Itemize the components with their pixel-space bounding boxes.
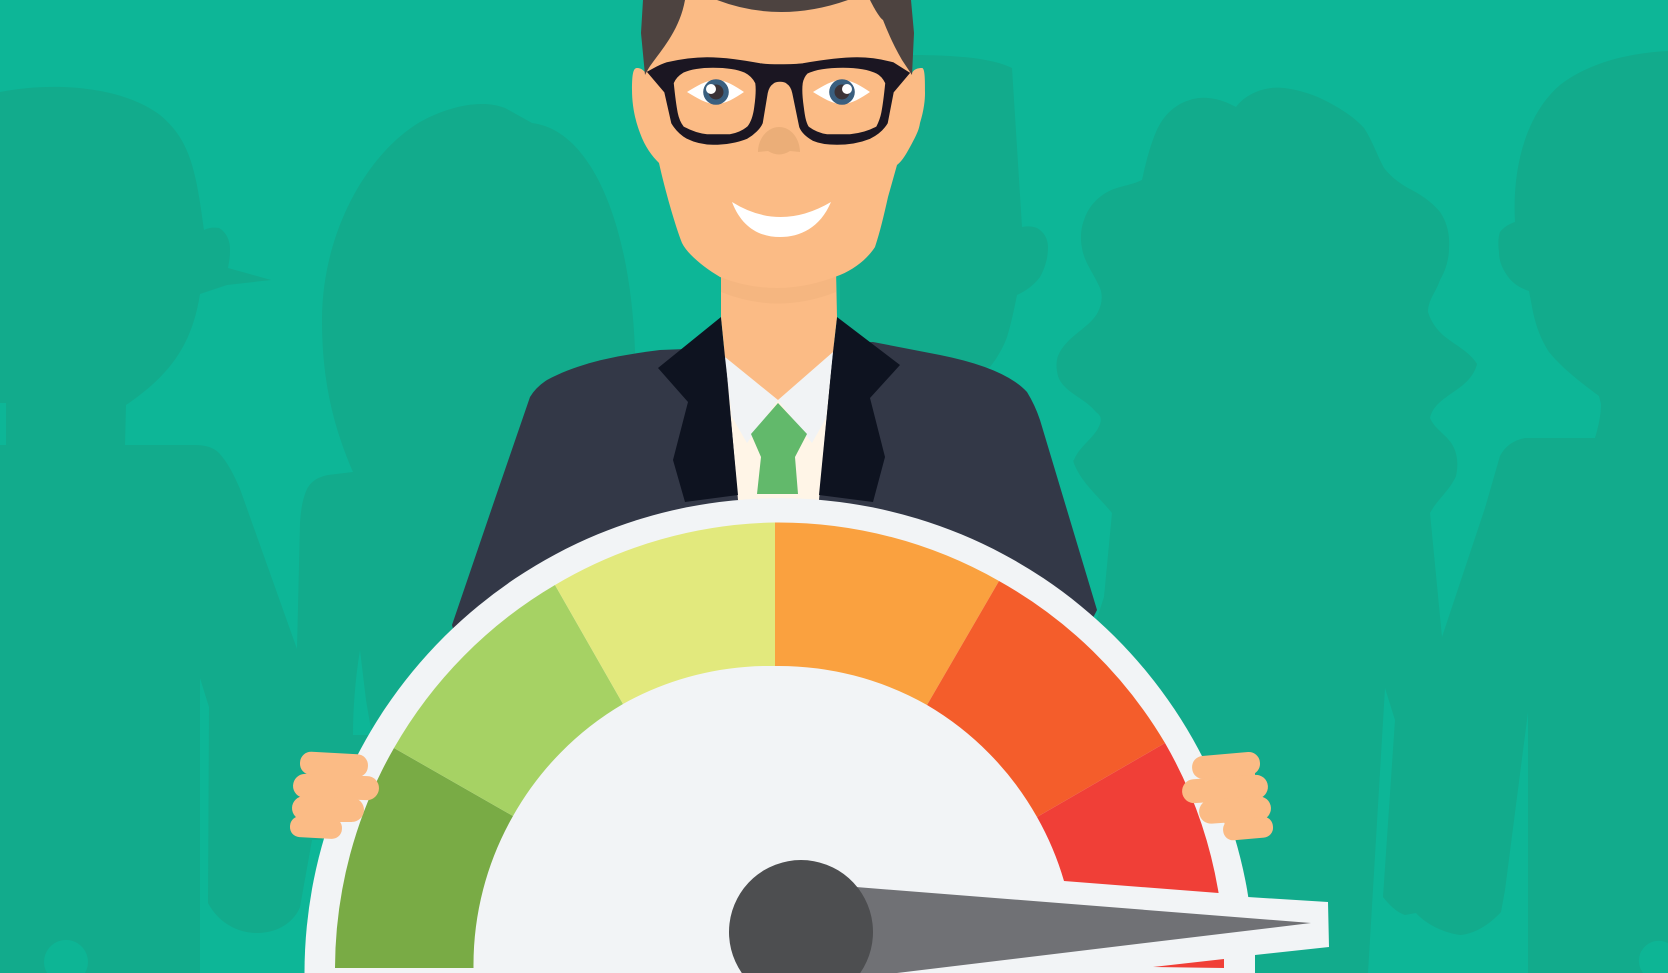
right eye [813,79,870,105]
needle [856,887,1311,973]
gauge segment: orange red [927,581,1165,817]
tie [751,403,807,494]
silhouette detail: left arm gap [200,678,345,973]
nose [758,127,800,154]
gauge white dial [304,498,1254,973]
hair [641,0,914,75]
shirt collar [725,352,833,443]
gauge segment: orange [775,522,999,705]
shirt [725,350,833,500]
glasses [648,58,909,144]
suit jacket [452,342,1097,800]
gauge lower red sliver [1153,959,1224,968]
left hand [289,751,379,839]
silhouette detail: right arm gap [1368,688,1528,973]
silhouette detail: shoulder gap far left [0,403,6,445]
gauge segment: yellow [555,522,775,704]
silhouette: person far left [0,87,370,973]
silhouette detail: sliver beside gauge [353,650,372,735]
neck [721,270,837,400]
silhouette detail: round head bottom right [1639,941,1668,973]
right lapel [819,317,900,502]
right hand [1181,751,1274,841]
gauge segment: light green [394,585,623,816]
man [452,0,1097,800]
left lapel [658,317,738,502]
needle white outline [1240,896,1329,973]
ears and face [632,0,925,288]
gauge [304,498,1329,973]
silhouette: curly hair person [1056,88,1477,973]
gauge segment: red [1037,743,1219,893]
mouth [732,202,831,237]
needle hub [729,860,873,973]
silhouette: person behind right shoulder [840,55,1048,400]
silhouette: person with oval head [297,104,640,760]
left eye [687,79,744,105]
neck shadow [721,270,836,304]
gauge segment: dark green [335,748,513,968]
silhouette detail: round head bottom left [44,940,88,973]
silhouette: person far right [1400,51,1668,973]
